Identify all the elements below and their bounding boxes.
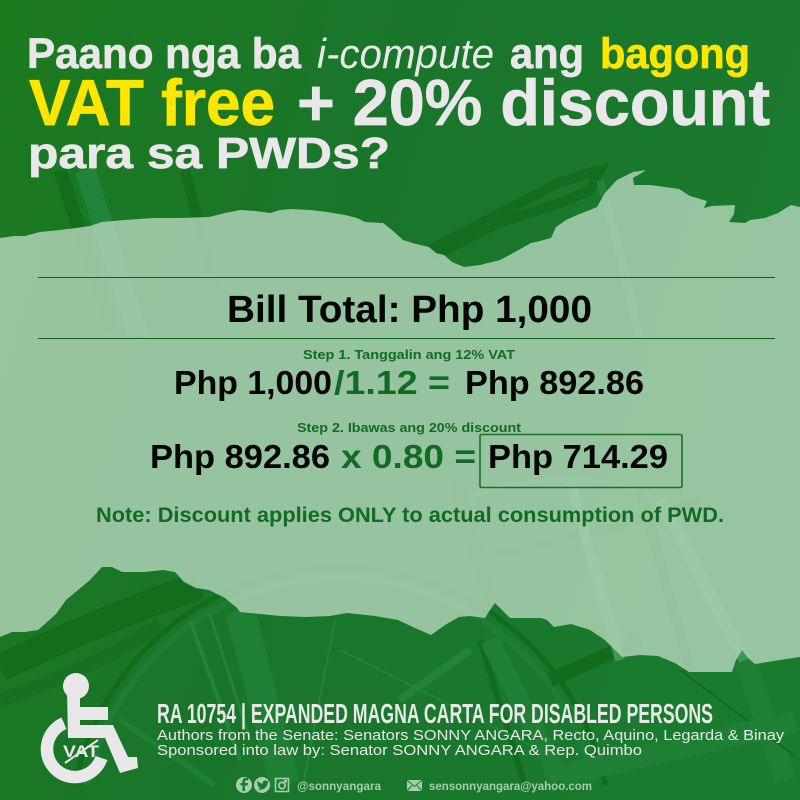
formula amount: Php 892.86 xyxy=(150,438,330,475)
formula result: Php 892.86 xyxy=(465,364,644,401)
formula amount: Php 1,000 xyxy=(174,364,332,401)
highlighted word bagong: bagong xyxy=(600,30,750,78)
strike line xyxy=(65,740,98,763)
step 2 formula xyxy=(150,438,668,475)
social handle: @sonnyangara xyxy=(297,779,381,793)
label: VAT: VAT xyxy=(63,742,100,761)
formula multiplier: x 0.80 = xyxy=(341,438,476,475)
title line 2: + 20% discount xyxy=(297,66,770,139)
icon: envelope xyxy=(407,780,422,791)
title line 1 continued: ang xyxy=(510,30,584,78)
icon: wheelchair with crossed VAT xyxy=(47,673,138,777)
title italic word: i-compute xyxy=(317,30,494,77)
step 1 label: Step 1. Tanggalin ang 12% VAT xyxy=(303,348,515,362)
divider top xyxy=(38,276,775,278)
icon: twitter xyxy=(254,777,270,793)
authors line: Authors from the Senate: Senators SONNY ANGARA, Recto, Aquino, Legarda & Binay xyxy=(157,728,785,744)
icon: facebook xyxy=(236,777,252,793)
divider bottom xyxy=(38,338,775,340)
sponsors line: Sponsored into law by: Senator SONNY ANGARA & Rep. Quimbo xyxy=(157,743,642,759)
note: Note: Discount applies ONLY to actual consumption of PWD. xyxy=(96,504,724,527)
result box xyxy=(480,434,682,488)
title line 2 highlight: VAT free xyxy=(29,66,275,139)
torn paper light panel xyxy=(0,170,800,672)
icon: instagram xyxy=(276,778,288,792)
email: sensonnyangara@yahoo.com xyxy=(429,779,592,793)
formula divisor: /1.12 = xyxy=(334,364,450,401)
title xyxy=(27,30,770,178)
title line 3: para sa PWDs? xyxy=(28,129,390,178)
final result: Php 714.29 xyxy=(488,438,668,475)
title line 1: Paano nga ba xyxy=(27,30,302,78)
step 1 formula xyxy=(174,364,644,401)
bill total heading: Bill Total: Php 1,000 xyxy=(227,289,592,331)
step 2 label: Step 2. Ibawas ang 20% discount xyxy=(297,421,522,435)
